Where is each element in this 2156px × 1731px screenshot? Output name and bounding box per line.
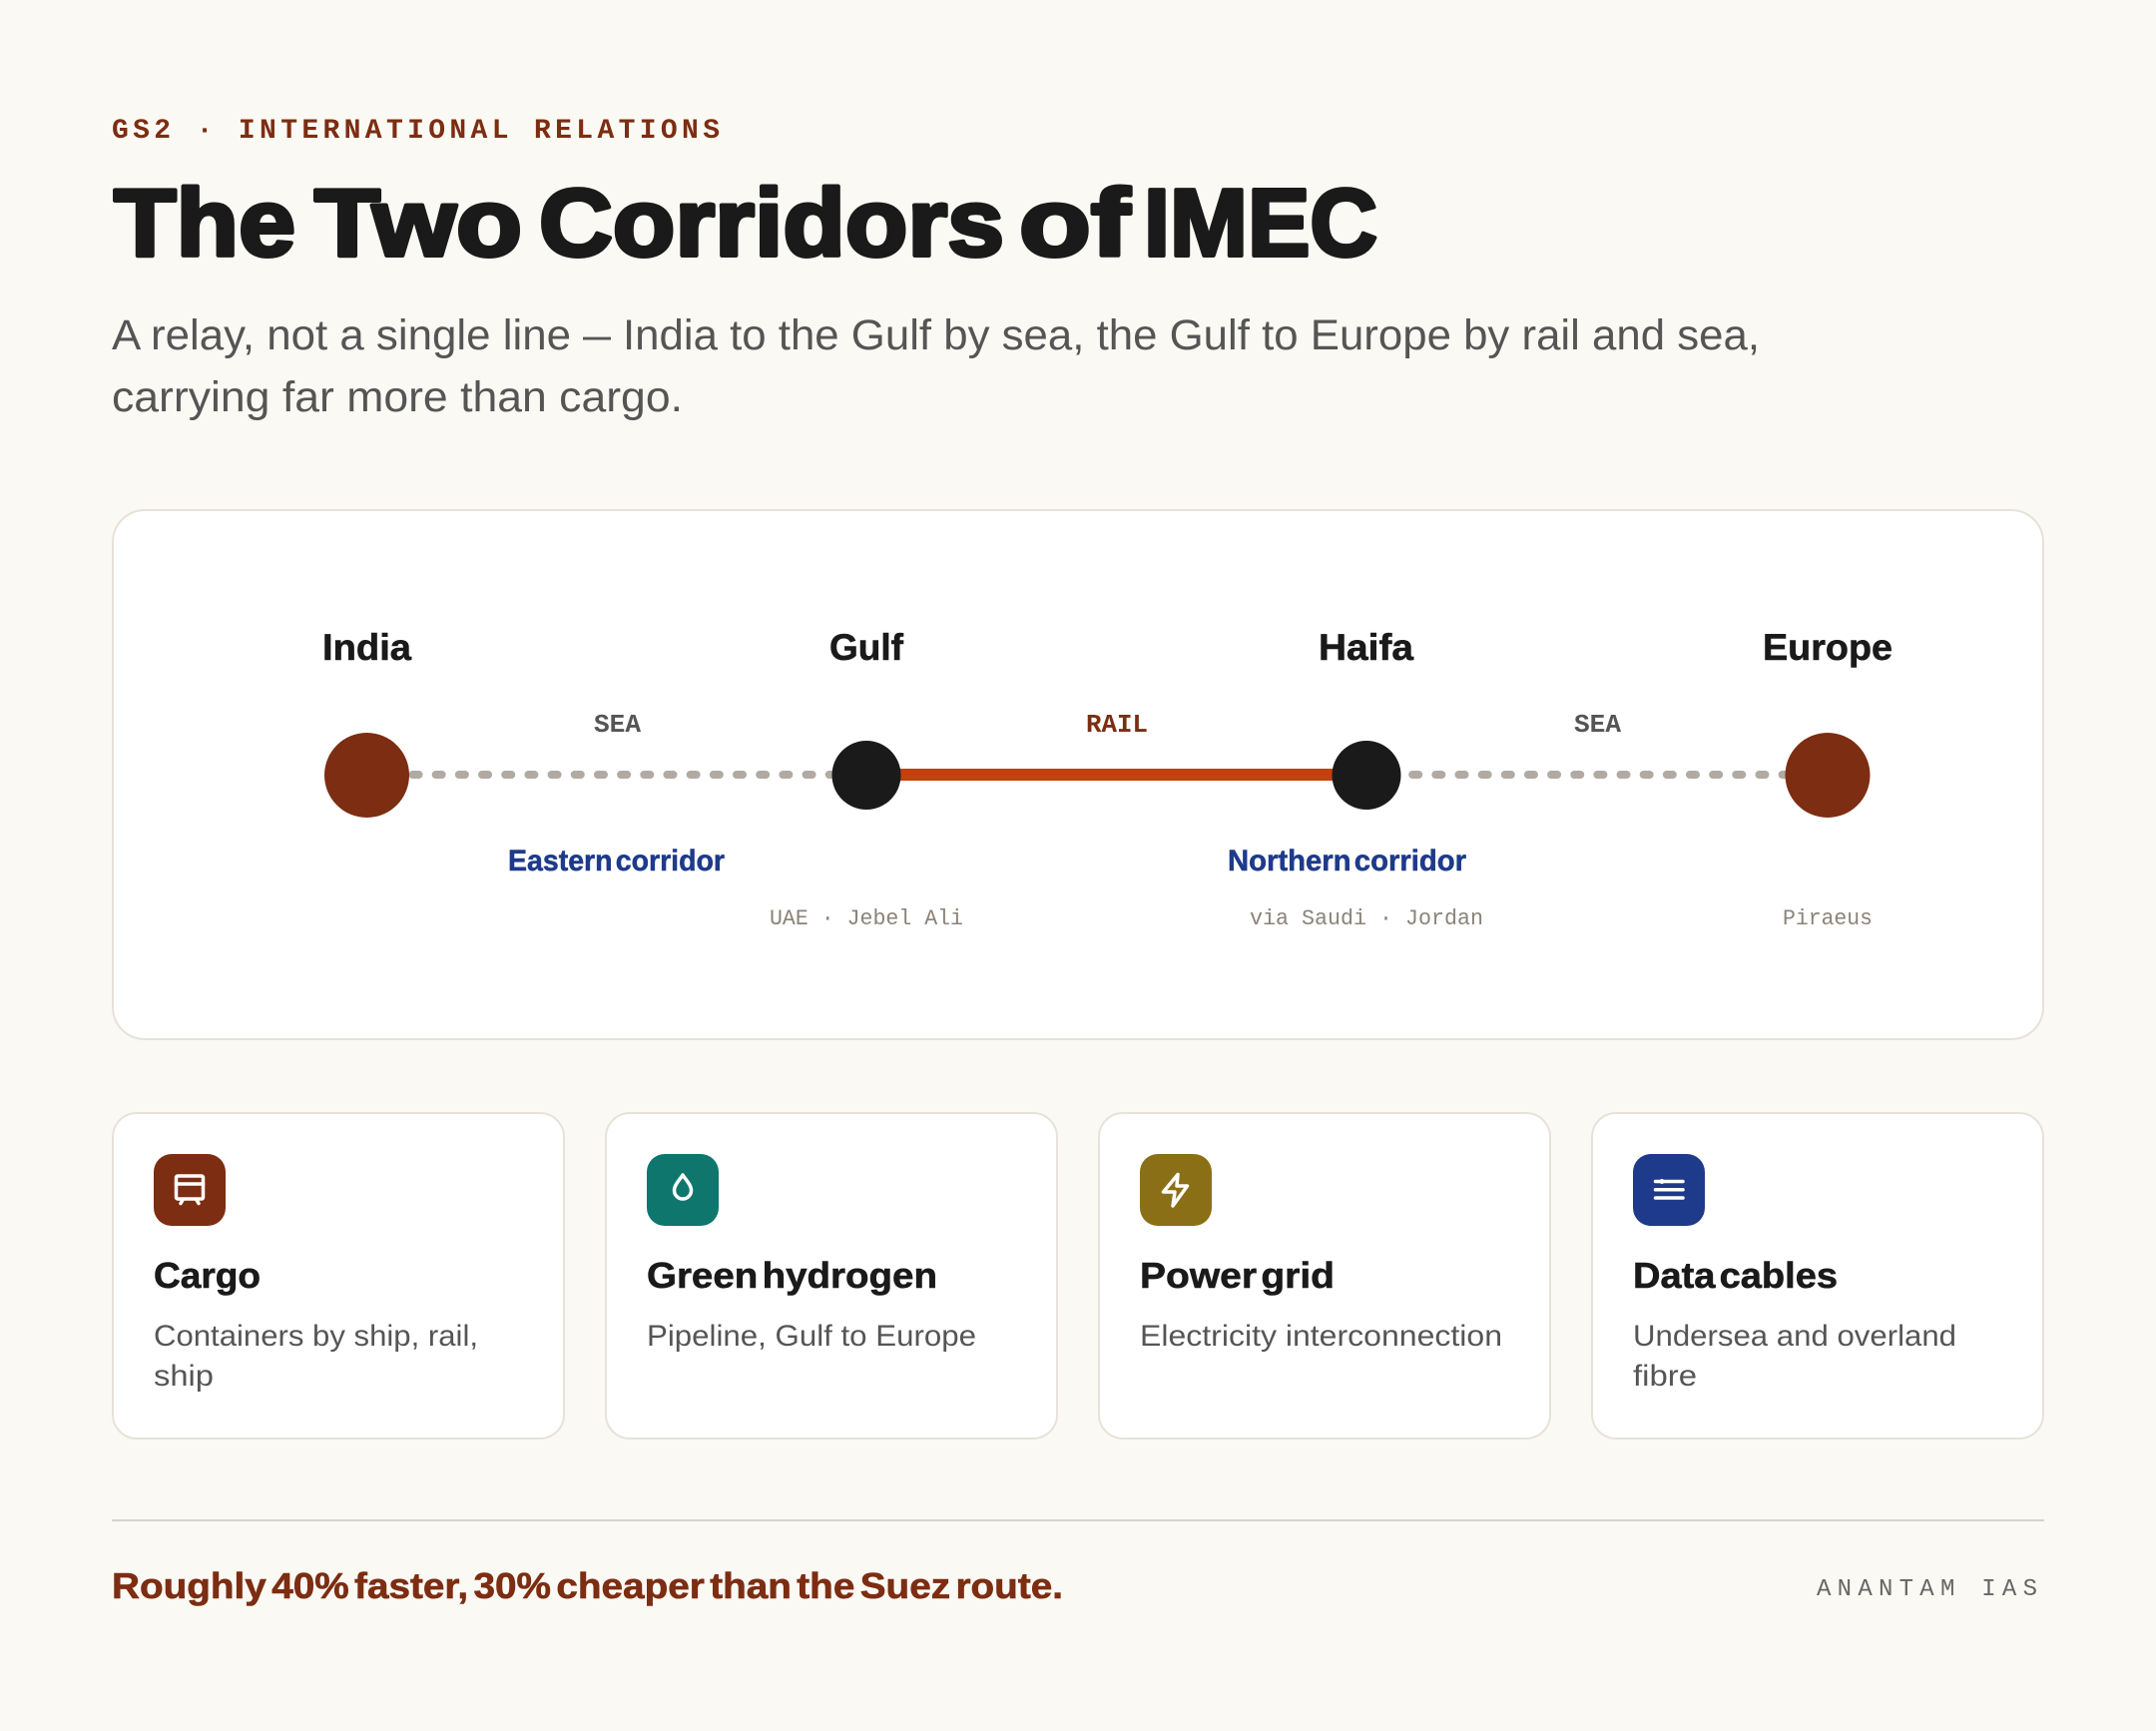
icon: water drop: [647, 1154, 719, 1226]
footer takeaway: Roughly 40% faster, 30% cheaper than the Suez route.: [112, 1565, 1063, 1606]
card description: Containers by ship, rail,: [154, 1320, 478, 1353]
mode label: sea: SEA: [1574, 710, 1621, 740]
mode label: rail: RAIL: [1086, 710, 1148, 740]
card: power grid: [1099, 1113, 1550, 1439]
card: data cables: [1592, 1113, 2043, 1439]
card: green hydrogen: [606, 1113, 1057, 1439]
card description: ship: [154, 1360, 214, 1393]
footer brand: ANANTAM IAS: [1817, 1576, 2037, 1603]
card description: fibre: [1633, 1360, 1697, 1393]
node: Europe: Europe: [1763, 627, 1892, 668]
node: Gulf: UAE · Jebel Ali: [770, 906, 963, 931]
subtitle: —: [583, 311, 611, 359]
subtitle: India to the Gulf by sea, the Gulf to Europe by rail and sea,: [623, 311, 1760, 359]
card description: [154, 1320, 478, 1393]
subtitle: A relay, not a single line: [112, 311, 571, 359]
header: [112, 116, 1760, 421]
card description: Undersea and overland: [1633, 1320, 1956, 1353]
card: cargo: [113, 1113, 564, 1439]
icon: cable lines: [1633, 1154, 1705, 1226]
panel: corridor route diagram: [113, 510, 2043, 1039]
title: Corridors: [539, 170, 1004, 277]
card title: Data cables: [1633, 1255, 1838, 1296]
node: Haifa: [1250, 627, 1483, 931]
title: of: [1019, 170, 1131, 277]
route: sea leg Haifa to Europe: [1412, 771, 1789, 779]
subtitle: [112, 311, 1760, 421]
title: The: [114, 170, 295, 277]
card title: Green hydrogen: [647, 1255, 937, 1296]
card description: [1633, 1320, 1956, 1393]
title: [114, 170, 1377, 277]
card description: Electricity interconnection: [1140, 1320, 1502, 1353]
subtitle: carrying far more than cargo.: [112, 373, 683, 421]
node: Haifa: via Saudi · Jordan: [1250, 906, 1483, 931]
title: IMEC: [1144, 170, 1377, 277]
icon: cargo wagon: [154, 1154, 226, 1226]
icon: lightning bolt: [1140, 1154, 1212, 1226]
node: India: [322, 627, 411, 818]
card title: Cargo: [154, 1255, 261, 1296]
node: Gulf: Gulf: [829, 627, 904, 668]
corridor label: eastern: Eastern corridor: [508, 845, 725, 877]
route: rail leg Gulf to Haifa: [878, 769, 1348, 781]
node: Europe: Piraeus: [1783, 906, 1873, 931]
route: sea leg India to Gulf: [413, 771, 832, 779]
node: Gulf: [770, 627, 963, 931]
node: Europe: [1763, 627, 1892, 931]
node: India: India: [322, 627, 411, 668]
card description: Pipeline, Gulf to Europe: [647, 1320, 976, 1353]
corridor label: northern: Northern corridor: [1228, 845, 1466, 877]
eyebrow label: GS2 · INTERNATIONAL RELATIONS: [112, 116, 720, 147]
node: Haifa: Haifa: [1319, 627, 1413, 668]
card title: Power grid: [1140, 1255, 1335, 1296]
mode label: sea: SEA: [594, 710, 641, 740]
title: Two: [314, 170, 522, 277]
